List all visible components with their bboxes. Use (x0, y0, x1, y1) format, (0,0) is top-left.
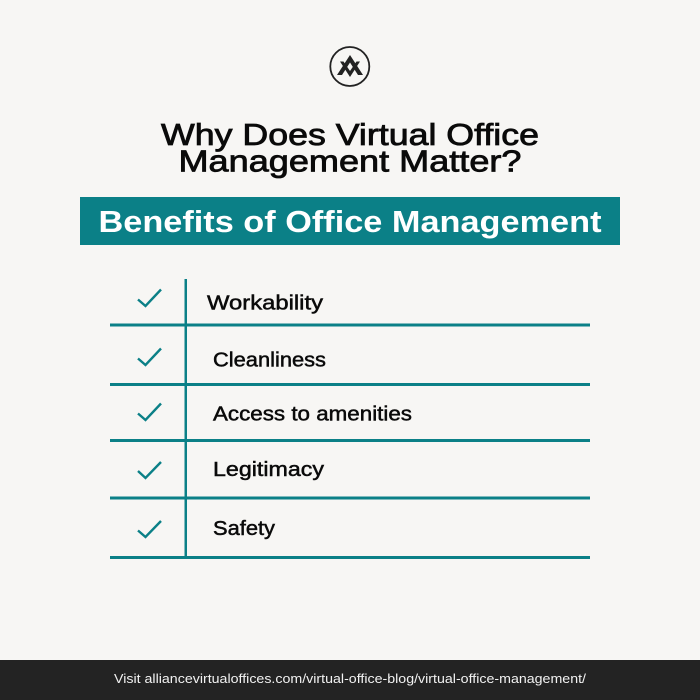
banner: benefits heading (80, 197, 620, 245)
row: safety: Safety (213, 517, 276, 540)
row: legitimacy: Legitimacy (213, 458, 325, 481)
row: safety (138, 517, 276, 540)
benefits table (110, 279, 590, 559)
row: cleanliness (138, 348, 326, 372)
row: workability (138, 290, 324, 314)
row: legitimacy (138, 458, 325, 481)
footer bar: Visit alliancevirtualoffices.com/virtual-office-blog/virtual-office-management/ (114, 671, 586, 686)
footer bar (0, 660, 700, 700)
title (161, 118, 539, 178)
title: Why Does Virtual Office (161, 118, 539, 152)
row: workability: Workability (207, 292, 324, 314)
row: access to amenities (138, 402, 412, 426)
banner: benefits heading: Benefits of Office Management (98, 204, 602, 239)
table grid lines (110, 279, 590, 559)
title: Management Matter? (178, 144, 522, 178)
row: access to amenities: Access to amenities (213, 402, 412, 426)
icon: logo (330, 47, 369, 86)
row: cleanliness: Cleanliness (213, 348, 326, 372)
